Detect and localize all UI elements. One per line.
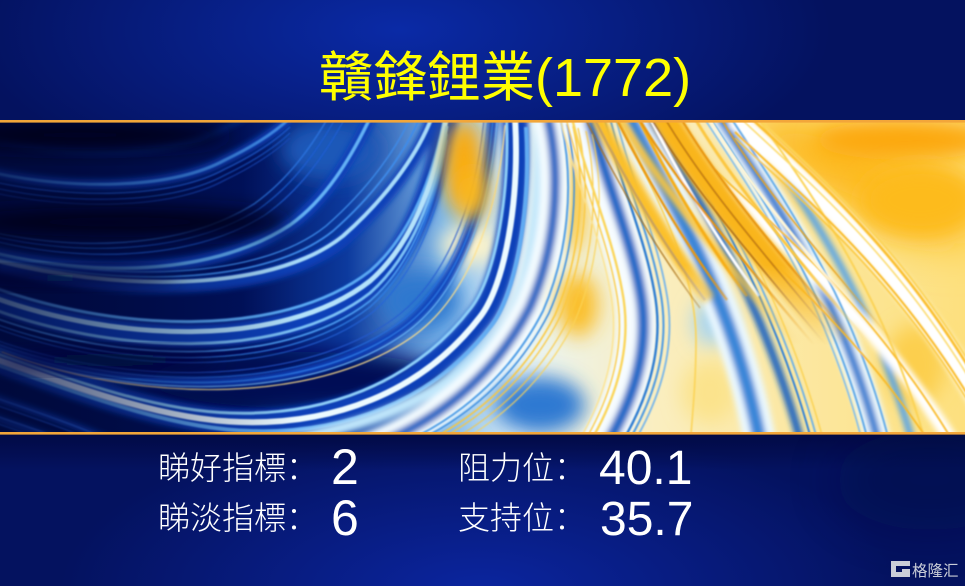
bottom gold rule (0, 432, 965, 435)
stat: bearish indicators (158, 490, 359, 546)
value: bearish indicators: 6 (331, 490, 359, 546)
centre and right soft bands (270, 122, 965, 432)
orange patches (444, 119, 598, 337)
label: bearish indicators: 睇淡指標： (158, 493, 318, 539)
title: 贛鋒鋰業(1772) (319, 48, 691, 108)
watermark logo (891, 559, 959, 581)
centre and right fine lines (421, 122, 965, 432)
stat: support level (458, 493, 693, 546)
value: support level: 35.7 (600, 493, 693, 546)
value: resistance level: 40.1 (599, 442, 692, 495)
value: bullish indicators: 2 (331, 439, 359, 495)
watermark text: 格隆汇 (912, 559, 959, 581)
dark and colour patches (244, 122, 965, 432)
label: support level: 支持位： (458, 493, 586, 539)
left arcs (0, 122, 534, 432)
icon: G mark (891, 561, 910, 577)
stat: bullish indicators (158, 439, 359, 495)
golden fine ripples (586, 122, 886, 342)
label: bullish indicators: 睇好指標： (158, 443, 318, 489)
label: resistance level: 阻力位： (458, 443, 586, 489)
top gold rule (0, 120, 965, 123)
wave image band (0, 122, 965, 432)
stat: resistance level (458, 442, 692, 495)
left side darkening (0, 121, 300, 432)
